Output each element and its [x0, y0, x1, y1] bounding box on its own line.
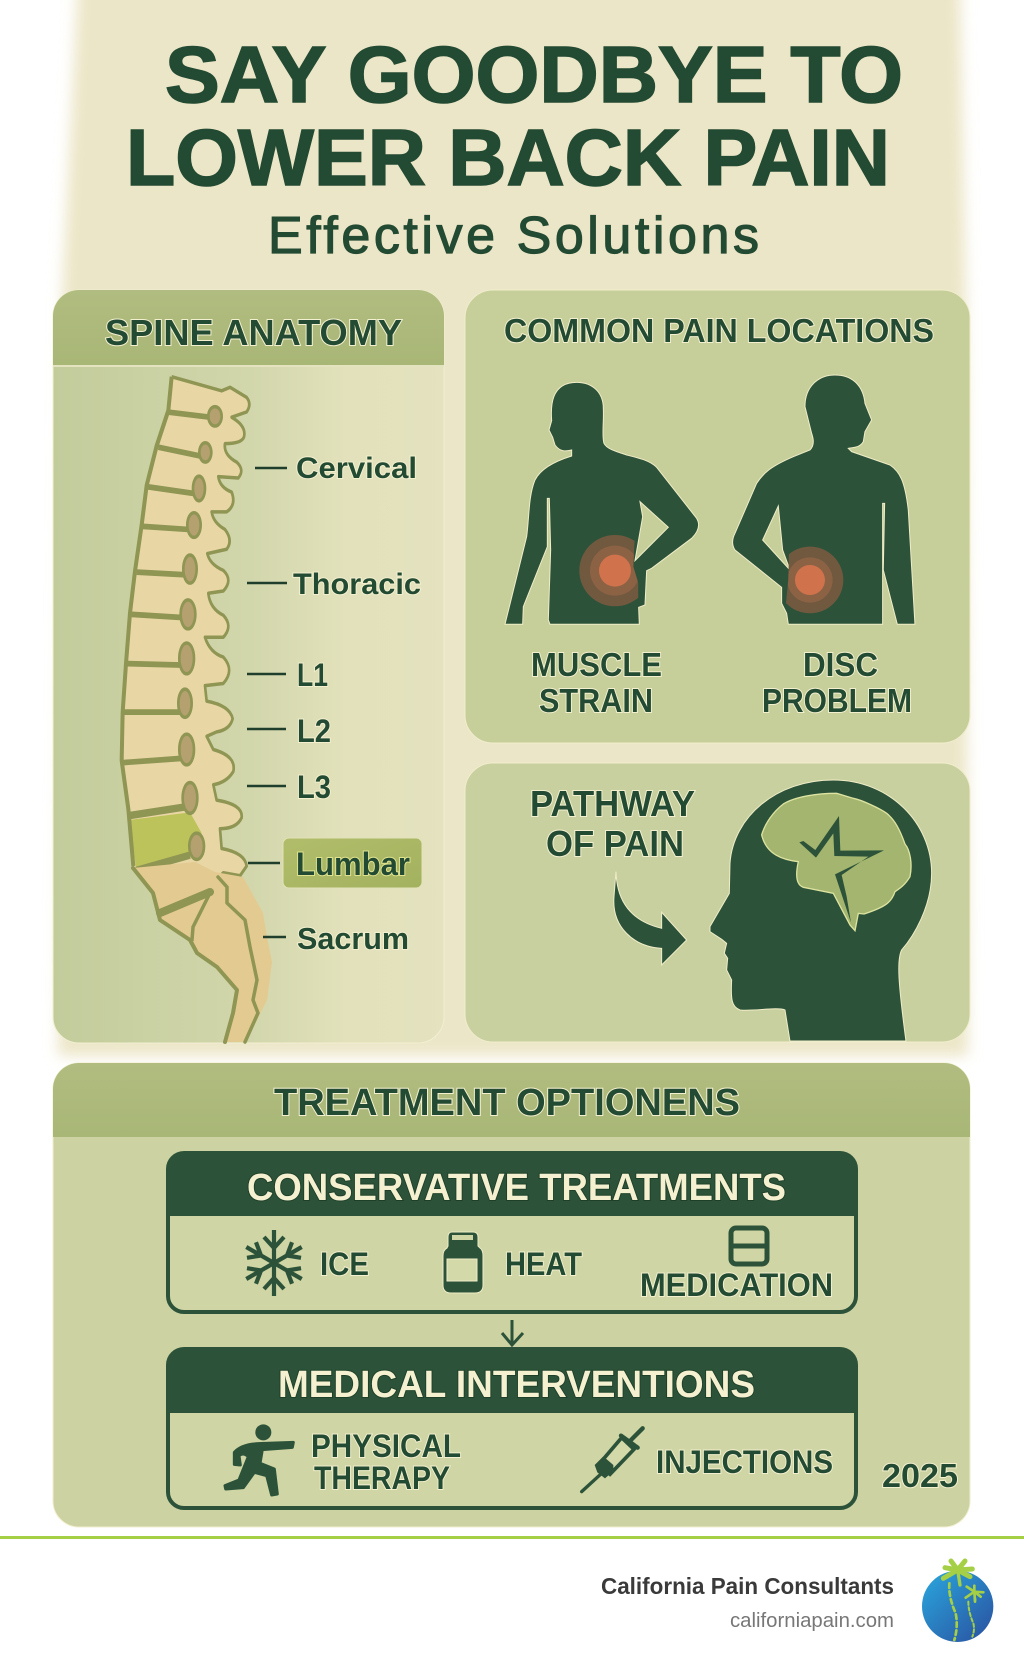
panel: treatment options	[53, 1063, 970, 1527]
label: lumbar highlighted	[248, 838, 422, 888]
heading: spine anatomy: SPINE ANATOMY	[105, 312, 402, 353]
label: injections: INJECTIONS	[656, 1444, 833, 1480]
label: muscle strain	[531, 646, 662, 719]
heading: medical interventions: MEDICAL INTERVENTIONS	[278, 1364, 755, 1406]
label: muscle strain: STRAIN	[539, 682, 653, 719]
label: sacrum: Sacrum	[297, 921, 409, 956]
icon: brain	[762, 793, 911, 931]
spine illustration	[122, 377, 272, 1042]
label: physical therapy: THERAPY	[314, 1460, 450, 1496]
panel: pathway of pain	[465, 763, 970, 1042]
label: muscle strain: MUSCLE	[531, 646, 662, 683]
label: lumbar highlighted: Lumbar	[296, 846, 410, 882]
footer: brand text: californiapain.com	[730, 1610, 894, 1632]
label: cervical: Cervical	[296, 452, 417, 485]
panel header: spine anatomy	[53, 290, 444, 367]
heading: pathway of pain	[530, 783, 695, 864]
figure: muscle strain	[505, 382, 699, 624]
panel: spine anatomy	[53, 290, 444, 1043]
footer: brand text: California Pain Consultants	[601, 1573, 894, 1599]
arrow: pain pathway	[614, 872, 687, 965]
background: cream sheet	[58, 0, 968, 1056]
icon: bottle	[443, 1232, 483, 1293]
icon: head with brain	[710, 780, 932, 1041]
title: LOWER BACK PAIN	[126, 113, 890, 202]
label: disc problem	[762, 646, 912, 719]
footer: brand text	[601, 1573, 894, 1632]
heading: treatment options: TREATMENT OPTIONENS	[274, 1082, 740, 1124]
icon: snowflake	[242, 1230, 306, 1296]
heading: pathway of pain: PATHWAY	[530, 783, 695, 824]
label: physical therapy	[311, 1428, 461, 1496]
subtitle: Effective Solutions	[268, 207, 759, 265]
label: thoracic: Thoracic	[293, 568, 421, 601]
label: L2: L2	[297, 713, 331, 749]
title	[126, 30, 903, 202]
label: L1	[247, 657, 328, 693]
label: heat: HEAT	[505, 1246, 582, 1282]
label: ice: ICE	[320, 1246, 369, 1282]
box: conservative treatments	[168, 1153, 856, 1312]
label: L3	[247, 769, 331, 805]
title: SAY GOODBYE TO	[165, 30, 903, 119]
figure: disc problem	[732, 375, 915, 624]
arrow: down to medical interventions	[502, 1320, 523, 1345]
label: L2	[247, 713, 331, 749]
heading: common pain locations: COMMON PAIN LOCATIONS	[504, 312, 934, 349]
heading: pathway of pain: OF PAIN	[546, 823, 684, 864]
panel header: treatment options	[53, 1063, 970, 1137]
footer divider	[0, 1536, 1024, 1539]
label: L1: L1	[297, 657, 328, 693]
box: medical interventions	[168, 1349, 856, 1508]
icon: pain bolt	[799, 816, 884, 923]
label: disc problem: PROBLEM	[762, 682, 912, 719]
icon: palm tree logo	[922, 1561, 993, 1642]
panel: common pain locations	[465, 290, 970, 743]
label: physical therapy: PHYSICAL	[311, 1428, 461, 1464]
label: L3: L3	[297, 769, 331, 805]
label: medication: MEDICATION	[640, 1267, 833, 1303]
icon: medication box	[731, 1228, 767, 1264]
year label: 2025	[882, 1457, 958, 1494]
icon: syringe	[582, 1428, 643, 1492]
label: disc problem: DISC	[803, 646, 878, 683]
icon: runner	[225, 1424, 293, 1495]
heading: conservative treatments: CONSERVATIVE TREATMENTS	[247, 1167, 786, 1209]
